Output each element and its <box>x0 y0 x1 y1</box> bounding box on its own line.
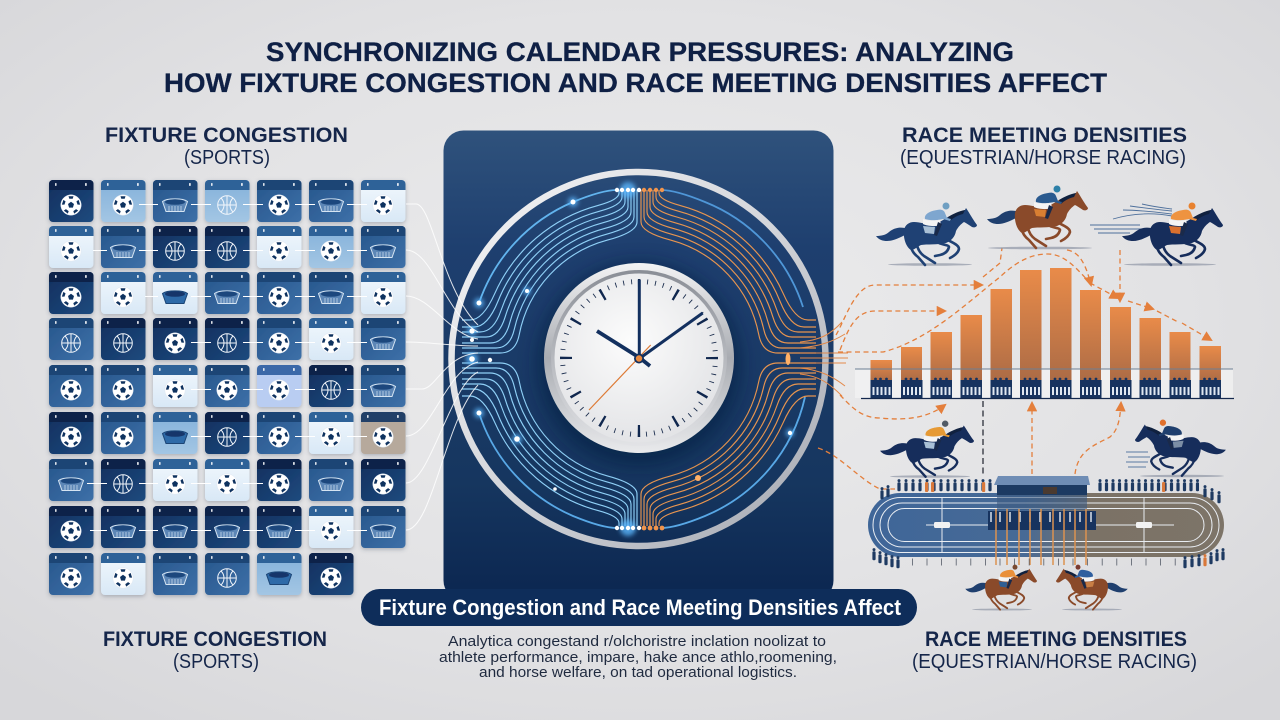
tile: football <box>49 272 94 314</box>
dashed trend arrows <box>818 248 1211 489</box>
tile: football <box>101 272 146 314</box>
circuit lines: racing, lower right <box>641 363 816 526</box>
horse 2 <box>987 186 1092 249</box>
heading: race meeting densities top: (EQUESTRIAN/HORSE RACING) <box>900 147 1186 169</box>
tile: basketball <box>205 226 250 268</box>
racetrack <box>868 476 1224 565</box>
banner pill <box>361 589 917 626</box>
tile: football <box>49 412 94 454</box>
tile: football <box>361 180 406 222</box>
tile: stadium <box>49 459 94 501</box>
tile: stadium <box>361 365 406 407</box>
heading: fixture congestion top: FIXTURE CONGESTION <box>105 124 348 147</box>
tile: stadium <box>309 272 354 314</box>
tile: football <box>361 272 406 314</box>
description text <box>439 633 837 681</box>
horse 7 <box>1056 565 1128 610</box>
tile: stadium <box>101 506 146 548</box>
glowing orange nodes <box>642 188 790 530</box>
tile: football <box>257 226 302 268</box>
tile: stadium <box>205 272 250 314</box>
banner pill: Fixture Congestion and Race Meeting Densities Affect <box>379 595 902 620</box>
tile: football <box>205 365 250 407</box>
heading: race meeting densities bottom <box>912 628 1197 673</box>
heading: fixture congestion top <box>105 124 348 169</box>
heading: fixture congestion top: (SPORTS) <box>184 147 270 169</box>
tile: stadium <box>153 412 198 454</box>
description text: athlete performance, impare, hake ance athlo,roomening, <box>439 649 837 666</box>
clock hands <box>589 280 703 410</box>
tile: football <box>309 553 354 595</box>
tile: football <box>257 318 302 360</box>
horse 4 <box>880 421 974 478</box>
tile: stadium <box>205 506 250 548</box>
tile: football <box>257 272 302 314</box>
heading: race meeting densities bottom: RACE MEETING DENSITIES <box>925 628 1187 651</box>
tile: football <box>257 180 302 222</box>
race bar chart <box>855 268 1234 398</box>
tile connectors <box>87 204 367 530</box>
tile: football <box>205 459 250 501</box>
sweeping outer arcs <box>479 190 805 528</box>
tile: football <box>153 459 198 501</box>
title <box>164 37 1108 98</box>
panel: fixture calendar grid <box>49 180 406 595</box>
tile: basketball <box>101 318 146 360</box>
horse 5 <box>1126 420 1226 477</box>
tile: stadium <box>101 226 146 268</box>
tile: football <box>49 180 94 222</box>
tile: basketball <box>101 459 146 501</box>
tile: stadium <box>153 272 198 314</box>
tile: stadium <box>361 318 406 360</box>
heading: fixture congestion bottom: (SPORTS) <box>173 651 259 673</box>
circuit lines: sports, upper left <box>462 190 637 353</box>
tile: stadium <box>153 553 198 595</box>
circuit lines: sports, lower left <box>462 363 637 526</box>
tile: stadium <box>257 506 302 548</box>
title: HOW FIXTURE CONGESTION AND RACE MEETING DENSITIES AFFECT <box>164 68 1108 98</box>
horse 3 with speed lines <box>1090 202 1223 266</box>
tile: football <box>101 180 146 222</box>
panel: central dial <box>444 130 834 600</box>
description text: and horse welfare, on tad operational logistics. <box>479 664 797 681</box>
tile: football <box>153 365 198 407</box>
tile: stadium <box>153 180 198 222</box>
data lines: dial into race chart <box>800 322 848 396</box>
clock <box>544 263 734 453</box>
bars <box>870 268 1221 382</box>
dashed marker line <box>982 401 984 476</box>
heading: race meeting densities top: RACE MEETING DENSITIES <box>902 124 1187 147</box>
heading: fixture congestion bottom: FIXTURE CONGESTION <box>103 628 327 651</box>
tile: football <box>49 506 94 548</box>
tile: stadium <box>153 506 198 548</box>
tile: football <box>257 459 302 501</box>
tile: football <box>153 318 198 360</box>
glowing blue nodes <box>466 182 794 536</box>
tile: stadium <box>361 506 406 548</box>
clock shadow <box>537 262 741 466</box>
grandstand <box>994 476 1090 510</box>
tile: football <box>257 365 302 407</box>
tile: basketball <box>205 180 250 222</box>
tile: basketball <box>49 318 94 360</box>
data lines: calendar grid into dial <box>406 204 478 530</box>
tile: basketball <box>205 318 250 360</box>
tile: stadium <box>309 459 354 501</box>
horse 6 <box>965 565 1037 610</box>
tile: stadium <box>309 180 354 222</box>
tile: football <box>49 553 94 595</box>
tile: football <box>361 459 406 501</box>
tile: football <box>101 365 146 407</box>
horse 1 <box>876 202 977 266</box>
tile: stadium <box>257 553 302 595</box>
tile: basketball <box>309 365 354 407</box>
description text: Analytica congestand r/olchoristre inclation noolizat to <box>448 633 826 650</box>
crowd blocks <box>870 378 1221 398</box>
tile: football <box>309 226 354 268</box>
tile: basketball <box>153 226 198 268</box>
circuit lines: racing, upper right <box>641 190 816 353</box>
tile: football <box>101 553 146 595</box>
heading: fixture congestion bottom <box>103 628 327 673</box>
track lanes <box>873 497 1219 553</box>
tile: football <box>309 506 354 548</box>
starting gates <box>988 509 1096 565</box>
tile: football <box>257 412 302 454</box>
tile: football <box>309 412 354 454</box>
tile: basketball <box>205 553 250 595</box>
tile: football <box>101 412 146 454</box>
tile: football <box>361 412 406 454</box>
tile: stadium <box>361 226 406 268</box>
spectators <box>872 479 1225 568</box>
title: SYNCHRONIZING CALENDAR PRESSURES: ANALYZING <box>266 37 1014 67</box>
fence ticks <box>912 558 1183 566</box>
tile: basketball <box>205 412 250 454</box>
tile: football <box>49 226 94 268</box>
heading: race meeting densities top <box>900 124 1187 169</box>
tile: football <box>49 365 94 407</box>
silver outer ring <box>452 172 826 546</box>
tile: football <box>309 318 354 360</box>
heading: race meeting densities bottom: (EQUESTRIAN/HORSE RACING) <box>912 651 1197 673</box>
